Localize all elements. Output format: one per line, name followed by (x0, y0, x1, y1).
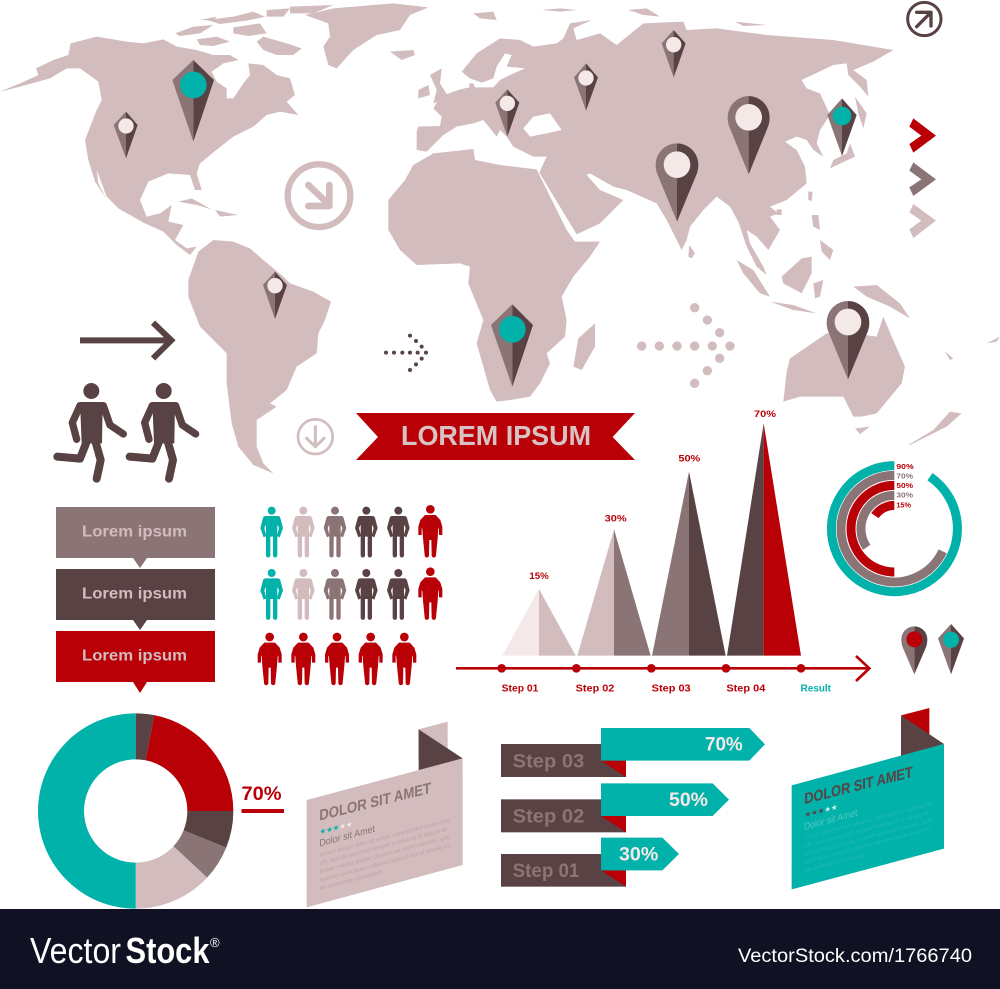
slice grey (173, 830, 226, 878)
step 03 bar: Step 03 (513, 751, 585, 772)
Japan (830, 97, 867, 168)
pin: India (656, 143, 698, 222)
seas (523, 113, 562, 137)
icon: circle arrow north-east (908, 2, 941, 36)
triangle 50%: 50% (678, 454, 701, 464)
footer url: VectorStock.com/1766740 (738, 945, 972, 967)
arctic islands (175, 5, 333, 55)
ring labels: 30% (896, 491, 914, 500)
footer logo: Vector (30, 930, 121, 971)
card body text: Lorem ipsum dolor sit amet, consectetur adipiscing (319, 818, 450, 859)
icon: red chevron (909, 118, 936, 153)
ribbon card: teal (792, 708, 944, 889)
step 03 bar (501, 728, 765, 777)
arrow: large dotted (637, 303, 735, 388)
step 01 bar: 30% (619, 845, 658, 866)
icon: light chevron (909, 204, 936, 238)
Eurasia (417, 20, 893, 275)
runner right (130, 383, 196, 479)
Africa (388, 149, 600, 402)
label box 3: Lorem ipsum (82, 648, 187, 664)
label box 1 (56, 507, 215, 568)
slice dark top (136, 713, 154, 760)
ring 15% (875, 505, 894, 516)
runner left (57, 383, 123, 479)
footer logo: ® (210, 935, 220, 950)
pin: Africa (491, 304, 533, 387)
label box 3 (56, 631, 215, 693)
card body text (319, 818, 450, 892)
triangle 70% (727, 409, 801, 656)
step 03 bar: 70% (705, 735, 743, 756)
card body text: elit, sed do eiusmod tempor incididunt ut labore et (804, 810, 929, 850)
pin: China (728, 96, 770, 174)
card body text: ea commodo consequat. (804, 852, 866, 874)
card body (307, 758, 463, 907)
slice red (146, 715, 233, 811)
Caribbean islands (178, 198, 238, 217)
icon: circle arrow south-east (288, 164, 350, 227)
label box 2 (56, 569, 215, 630)
Iceland (390, 50, 415, 60)
step 02 bar (501, 783, 729, 832)
footer bar (0, 909, 1000, 989)
star rating: ★★★★★ (320, 819, 353, 836)
British Isles (418, 68, 448, 103)
axis labels: Step 03 (652, 684, 691, 695)
pin: North America large (172, 60, 214, 142)
ring labels: 50% (896, 481, 914, 490)
card subheading: Dolor sit Amet (319, 824, 375, 850)
Tasmania (855, 427, 870, 434)
Russian north islands (473, 8, 767, 26)
card heading: DOLOR SIT AMET (319, 780, 431, 825)
pin: legend teal (938, 624, 964, 674)
title banner: LOREM IPSUM (401, 420, 591, 451)
donut callout 70%: 70% (242, 784, 282, 805)
step 02 bar: Step 02 (513, 806, 584, 827)
Madagascar (573, 323, 595, 370)
ring labels (896, 462, 914, 509)
pin: South America (263, 272, 287, 319)
arrow: small dotted (384, 334, 428, 372)
pin: Japan (827, 98, 857, 156)
New Zealand (908, 412, 962, 445)
card body text: dolore magna aliqua. Ut enim ad minim veniam, quis (804, 818, 932, 858)
ring labels: 70% (896, 472, 914, 481)
axis labels: Step 02 (576, 684, 615, 695)
step progress bars (501, 728, 765, 887)
Pacific islands (945, 337, 1000, 360)
footer logo: Stock (126, 930, 210, 971)
label box 2: Lorem ipsum (82, 586, 187, 602)
icon: circle arrow down (298, 419, 333, 454)
card body text: nostrud exercitation ullamco laboris nisi ut aliquip ex (319, 843, 450, 884)
triangle 70%: 70% (754, 409, 777, 419)
ring labels: 15% (896, 500, 911, 509)
card body (792, 744, 944, 889)
star rating: ★★★★★ (805, 802, 838, 819)
ring labels: 90% (896, 462, 914, 471)
pin: USA west (114, 112, 138, 158)
Indonesia and Philippines (737, 192, 910, 318)
card body text: elit, sed do eiusmod tempor incididunt ut labore et (319, 827, 447, 867)
donut chart (38, 713, 233, 909)
title banner (356, 413, 635, 460)
triangle 50% (652, 454, 726, 656)
pin: Russia north (662, 30, 686, 77)
radial progress chart (831, 462, 957, 592)
people row 1 (260, 505, 442, 558)
arrow: long line (80, 323, 171, 358)
triangle 15%: 15% (529, 571, 549, 581)
axis labels: Result (801, 684, 832, 695)
icon: two running figures (57, 383, 196, 479)
donut callout 70% (242, 784, 284, 813)
continent: North America (0, 37, 298, 255)
stacked labels (56, 507, 215, 693)
card body text: dolore magna aliqua. Ut enim ad minim veniam, quis (319, 834, 450, 875)
pin: legend red (901, 626, 927, 674)
step 02 bar: 50% (669, 790, 708, 811)
axis labels: Step 01 (502, 684, 539, 695)
people row 3 (258, 633, 416, 685)
pin: Europe (495, 89, 519, 137)
ribbon card: light (307, 722, 463, 907)
card body text (804, 801, 932, 874)
label box 1: Lorem ipsum (82, 524, 187, 540)
world map (0, 3, 1000, 473)
pin: Australia (827, 301, 869, 379)
ring 70% (841, 475, 943, 582)
timeline axis (456, 656, 869, 681)
Greenland (305, 3, 428, 68)
ring 50% (851, 485, 894, 572)
icon: grey chevron (909, 162, 936, 196)
triangle 30%: 30% (605, 514, 627, 524)
card body text: nostrud exercitation ullamco laboris nisi ut aliquip ex (804, 826, 932, 866)
ribbon fold (901, 708, 944, 756)
ring 90% (831, 466, 957, 592)
triangle bar chart (456, 409, 869, 695)
Australia (783, 317, 905, 417)
step 01 bar: Step 01 (513, 861, 580, 882)
card body text: ea commodo consequat. (319, 869, 383, 892)
slice teal (38, 713, 136, 909)
people row 2 (260, 567, 442, 620)
pin: Russia west (574, 63, 598, 111)
card body text: Lorem ipsum dolor sit amet, consectetur adipiscing (804, 801, 932, 841)
card heading: DOLOR SIT AMET (804, 764, 913, 808)
triangle 30% (577, 514, 651, 656)
axis labels (502, 684, 832, 695)
card subheading: Dolor sit Amet (804, 808, 857, 833)
South America (188, 240, 331, 473)
Sri Lanka (688, 245, 695, 258)
triangle 15% (502, 571, 576, 656)
slice light (136, 846, 207, 909)
ribbon fold (418, 722, 463, 771)
step 01 bar (501, 838, 679, 887)
ring 30% (861, 495, 894, 547)
slice dark (184, 811, 233, 848)
people pictogram grid (258, 505, 442, 685)
axis labels: Step 04 (726, 684, 766, 695)
